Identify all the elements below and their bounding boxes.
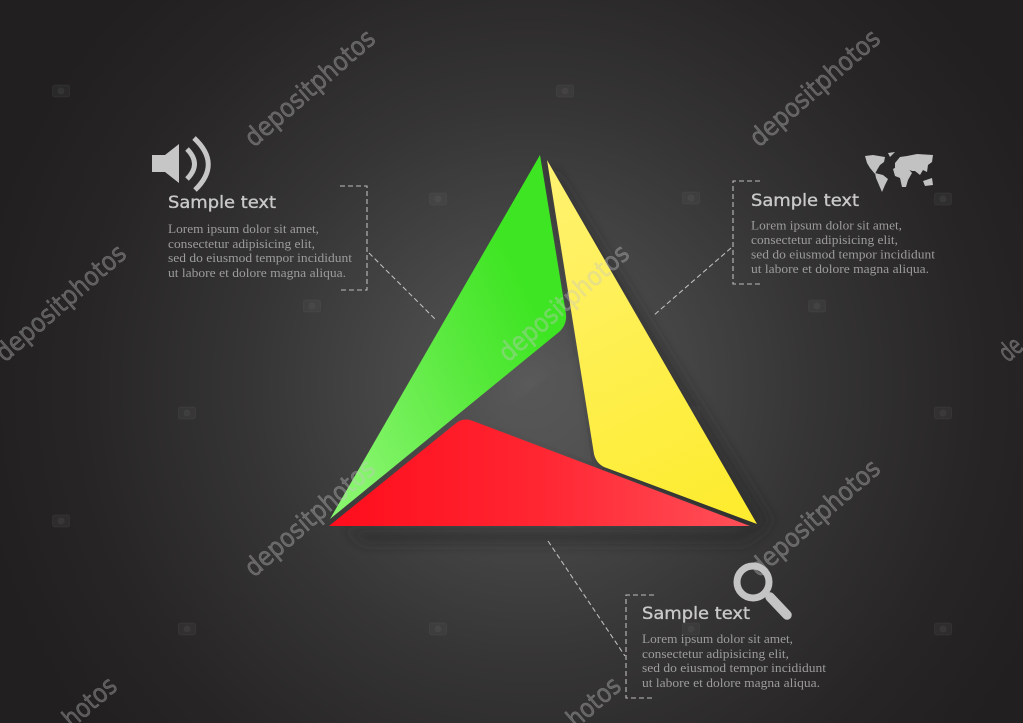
text block: left xyxy=(168,193,352,280)
triangle diagram xyxy=(329,155,757,526)
text block: left: sed do eiusmod tempor incididunt xyxy=(168,250,352,265)
watermarks: depositphotos xyxy=(239,454,382,583)
watermarks: depositphotos xyxy=(744,24,887,153)
connector: left xyxy=(340,186,436,320)
segment: red xyxy=(329,420,750,526)
text block: left: Lorem ipsum dolor sit amet, xyxy=(168,221,319,236)
segment: green xyxy=(330,155,566,519)
watermark camera icons xyxy=(52,85,952,635)
connector: right xyxy=(653,181,760,316)
connector: bottom xyxy=(548,541,654,698)
triangle shadow xyxy=(345,165,772,544)
watermarks: depositphotos xyxy=(744,454,887,583)
text block: right: sed do eiusmod tempor incididunt xyxy=(751,246,935,262)
icon: magnifier xyxy=(737,566,787,615)
text block: left: Sample text xyxy=(168,193,276,213)
text block: right: Sample text xyxy=(751,191,859,211)
text block: bottom: ut labore et dolore magna aliqua. xyxy=(642,675,820,690)
watermarks: depositphotos xyxy=(493,239,636,368)
text block: bottom xyxy=(642,604,826,690)
segment: yellow xyxy=(547,160,757,524)
text block: bottom: Sample text xyxy=(642,604,750,624)
text block: bottom: Lorem ipsum dolor sit amet, xyxy=(642,631,793,646)
watermarks: depositphotos xyxy=(239,24,382,153)
icon: speaker xyxy=(152,138,208,190)
icon: world map xyxy=(865,152,933,192)
text block: right: consectetur adipisicing elit, xyxy=(751,232,898,247)
text block: bottom: sed do eiusmod tempor incididunt xyxy=(642,660,826,675)
text block: right xyxy=(751,191,935,276)
text block: right: ut labore et dolore magna aliqua. xyxy=(751,261,929,276)
text block: right: Lorem ipsum dolor sit amet, xyxy=(751,218,902,232)
lighter centre wedge xyxy=(488,356,592,462)
text block: left: consectetur adipisicing elit, xyxy=(168,236,315,251)
text block: bottom: consectetur adipisicing elit, xyxy=(642,646,789,661)
text block: left: ut labore et dolore magna aliqua. xyxy=(168,265,346,280)
